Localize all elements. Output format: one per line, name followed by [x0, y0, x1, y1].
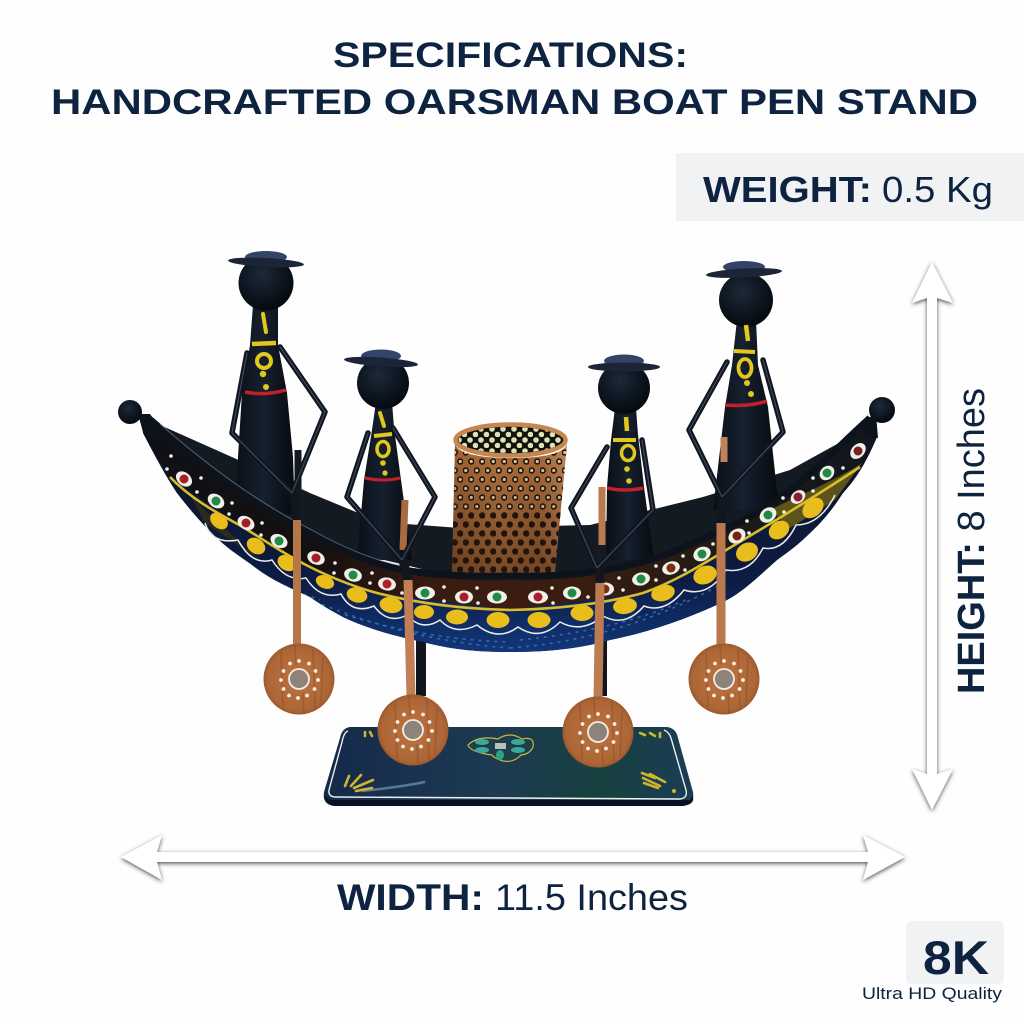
- figure bodies: [228, 251, 782, 560]
- weight panel: 0.5 Kg: [882, 169, 993, 210]
- width label: [337, 877, 688, 918]
- width label: WIDTH:: [337, 877, 484, 918]
- title: [51, 35, 978, 122]
- boat interior: [160, 425, 866, 590]
- title: HANDCRAFTED OARSMAN BOAT PEN STAND: [51, 82, 978, 122]
- weight panel: [676, 153, 1024, 221]
- base flower ornament: [468, 735, 533, 761]
- height arrow: [912, 262, 953, 810]
- yellow line: [170, 467, 860, 610]
- stand base: [324, 727, 693, 806]
- prow finials: [118, 397, 895, 440]
- figure: small left oarsman body: [344, 350, 418, 560]
- figure arms: [232, 347, 783, 568]
- boat hull: [118, 397, 900, 660]
- width arrow: [121, 835, 905, 880]
- figure: tall right oarsman body: [706, 261, 782, 510]
- 8K quality badge: Ultra HD Quality: [862, 985, 1003, 1003]
- figure: small right oarsman body: [588, 354, 660, 560]
- weight panel: WEIGHT:: [703, 169, 872, 210]
- width label: 11.5 Inches: [495, 877, 688, 918]
- 8K quality badge: 8K: [923, 931, 989, 984]
- title: SPECIFICATIONS:: [333, 35, 688, 75]
- hull rim: [147, 417, 870, 576]
- product: oarsman boat pen stand: [118, 251, 900, 806]
- oars: [294, 493, 722, 698]
- white dots: [165, 454, 845, 605]
- white gem outlines: [173, 440, 869, 604]
- olive wash at the ends: [770, 463, 862, 528]
- height label: HEIGHT: 8 Inches: [951, 388, 993, 694]
- white scallop line: [205, 495, 835, 634]
- short oar tops behind arms: [298, 437, 724, 550]
- lower hull band: [143, 433, 877, 660]
- yellow blobs: [207, 494, 828, 628]
- base corner sprigs: [345, 732, 665, 791]
- paddles: [264, 644, 760, 768]
- figure: tall left oarsman body: [228, 251, 304, 515]
- speckles: [290, 586, 716, 649]
- 8K quality badge: [862, 921, 1004, 1003]
- gem centres: [180, 446, 862, 602]
- base supports: [416, 640, 607, 696]
- pen holder: [452, 424, 567, 578]
